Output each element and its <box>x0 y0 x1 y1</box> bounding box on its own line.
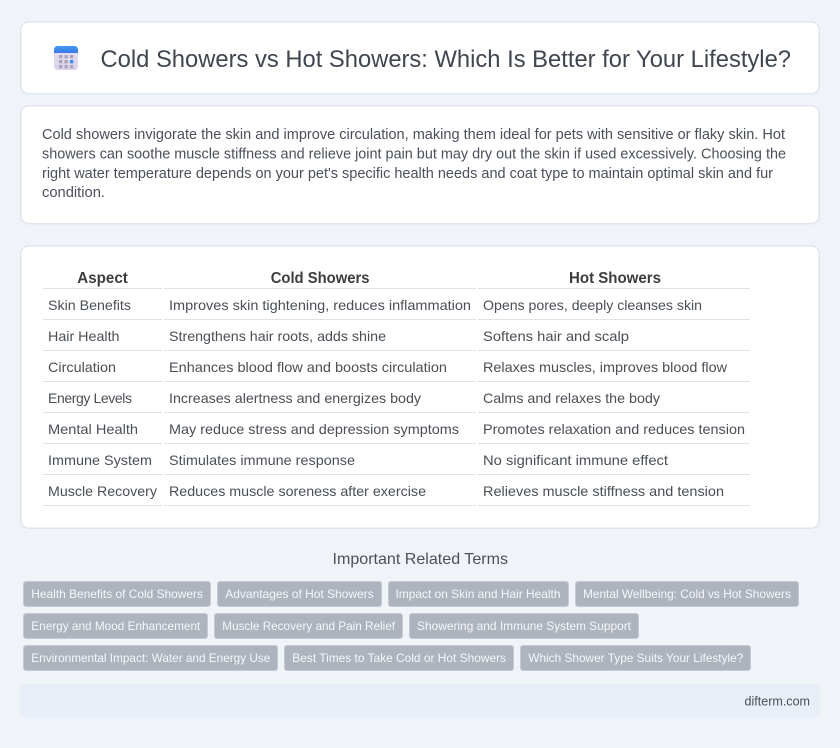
panel: introduction <box>21 106 819 224</box>
table row: muscle recovery <box>43 483 750 506</box>
table row: mental health: Promotes relaxation and reduces tension <box>483 421 745 437</box>
chip <box>410 614 638 638</box>
table row: immune system <box>43 452 750 475</box>
table row: hair health: Softens hair and scalp <box>483 328 629 344</box>
chip: Energy and Mood Enhancement <box>31 619 201 633</box>
chip <box>24 646 278 670</box>
table header row: Hot Showers <box>569 270 661 287</box>
table row: skin benefits <box>43 297 750 320</box>
table row: circulation: Circulation <box>48 359 116 375</box>
table row: immune system: Immune System <box>48 452 152 468</box>
table row: mental health: Mental Health <box>48 421 138 437</box>
icon: calendar <box>54 46 78 70</box>
text block: introduction: Cold showers invigorate the skin and improve circulation, making them ideal for pets with sensitive or flaky skin. Hot <box>42 127 785 143</box>
chip <box>24 582 210 606</box>
table row: hair health: Hair Health <box>48 328 120 344</box>
table row: energy levels: Increases alertness and energizes body <box>169 390 421 406</box>
table row: hair health <box>43 328 750 351</box>
chip <box>388 582 568 606</box>
table row: circulation: Enhances blood flow and boosts circulation <box>169 359 447 375</box>
table row: circulation: Relaxes muscles, improves blood flow <box>483 359 728 375</box>
table row: energy levels <box>43 390 750 413</box>
chip: Advantages of Hot Showers <box>225 587 374 601</box>
chip: Impact on Skin and Hair Health <box>396 587 560 601</box>
footer <box>20 684 820 718</box>
heading: important related terms: Important Related Terms <box>332 551 508 568</box>
chip: Best Times to Take Cold or Hot Showers <box>292 651 506 665</box>
table row: skin benefits: Skin Benefits <box>48 297 131 313</box>
chip <box>576 582 798 606</box>
table row: muscle recovery: Relieves muscle stiffness and tension <box>483 483 724 499</box>
chip: Environmental Impact: Water and Energy Use <box>31 651 271 665</box>
table row: muscle recovery: Muscle Recovery <box>48 483 157 499</box>
chip: Muscle Recovery and Pain Relief <box>222 619 396 633</box>
table row: mental health: May reduce stress and depression symptoms <box>169 421 459 437</box>
text block: introduction: condition. <box>42 185 105 201</box>
text block: introduction: showers can soothe muscle stiffness and relieve joint pain but may dry out the skin if used excessively. Choosing the <box>42 146 786 162</box>
table header row: Cold Showers <box>271 270 370 287</box>
table row: immune system: No significant immune effect <box>483 452 668 468</box>
chip <box>218 582 382 606</box>
chip <box>214 614 402 638</box>
table row: skin benefits: Opens pores, deeply cleanses skin <box>483 297 702 313</box>
table row: energy levels: Calms and relaxes the body <box>483 390 660 406</box>
chip: Showering and Immune System Support <box>417 619 632 633</box>
text block: introduction: right water temperature depends on your pet's specific health needs and coat type to maintain optimal skin and fur <box>42 166 773 182</box>
table header row <box>43 270 750 289</box>
chip <box>284 646 514 670</box>
chip: Health Benefits of Cold Showers <box>31 587 203 601</box>
table row: circulation <box>43 359 750 382</box>
chip <box>24 614 208 638</box>
panel: header <box>21 22 819 94</box>
related term chips <box>24 582 798 670</box>
footer source text: difterm.com <box>744 694 810 708</box>
table row: skin benefits: Improves skin tightening, reduces inflammation <box>169 297 471 313</box>
chip: Mental Wellbeing: Cold vs Hot Showers <box>583 587 791 601</box>
table row: muscle recovery: Reduces muscle soreness after exercise <box>169 483 426 499</box>
panel: comparison table <box>21 246 819 528</box>
title: Cold Showers vs Hot Showers: Which Is Better for Your Lifestyle? <box>100 46 791 73</box>
chip <box>520 646 750 670</box>
table row: energy levels: Energy Levels <box>48 390 132 406</box>
table header row: Aspect <box>77 270 128 287</box>
table row: immune system: Stimulates immune response <box>169 452 355 468</box>
table row: mental health <box>43 421 750 444</box>
table row: hair health: Strengthens hair roots, adds shine <box>169 328 386 344</box>
text block: introduction <box>42 127 786 201</box>
chip: Which Shower Type Suits Your Lifestyle? <box>528 651 744 665</box>
